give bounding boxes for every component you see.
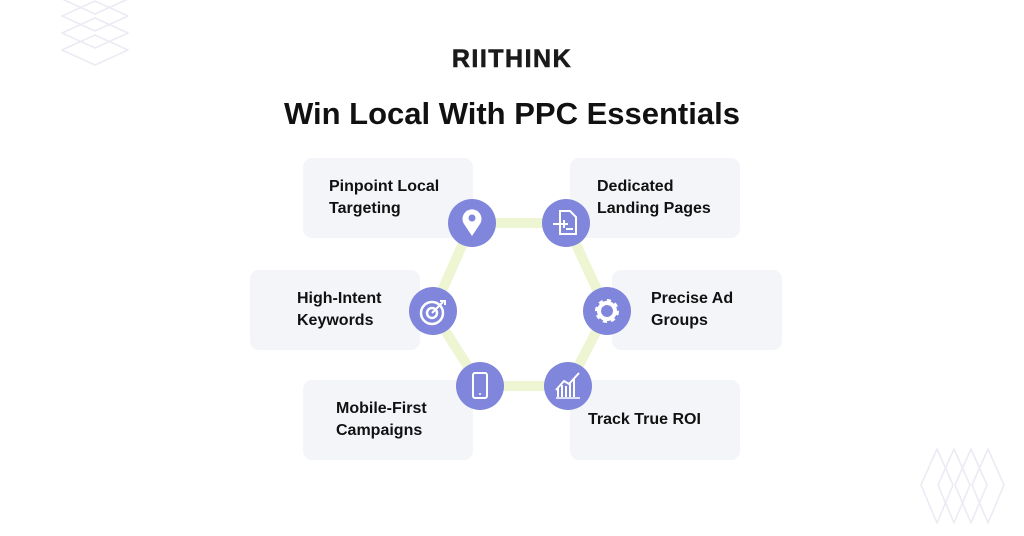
card: Mobile-First Campaigns: Mobile-First — [336, 400, 427, 417]
card: Track True ROI — [570, 380, 740, 460]
icon: document — [542, 199, 590, 247]
card: Mobile-First Campaigns: Campaigns — [336, 422, 422, 439]
decoration: top-left rhombs — [61, 0, 129, 66]
icon: target — [409, 287, 457, 335]
card: Dedicated Landing Pages — [570, 158, 740, 238]
card: Track True ROI: Track True ROI — [588, 411, 701, 428]
card: Pinpoint Local Targeting: Targeting — [329, 200, 401, 217]
decoration: bottom-right rhombs — [920, 448, 1005, 524]
card: Dedicated Landing Pages: Dedicated — [597, 178, 673, 195]
title: Win Local With PPC Essentials — [284, 96, 740, 131]
card: High-Intent Keywords: High-Intent — [297, 290, 381, 307]
card: Pinpoint Local Targeting: Pinpoint Local — [329, 178, 439, 195]
card: Precise Ad Groups: Precise Ad — [651, 290, 733, 307]
icon: growth chart — [544, 362, 592, 410]
icon: gear — [583, 287, 631, 335]
card: Pinpoint Local Targeting — [303, 158, 473, 238]
card: Precise Ad Groups — [612, 270, 782, 350]
icon: phone — [456, 362, 504, 410]
logo: RIITHINK — [452, 45, 572, 73]
card: Mobile-First Campaigns — [303, 380, 473, 460]
icon: location pin — [448, 199, 496, 247]
card: High-Intent Keywords: Keywords — [297, 312, 373, 329]
card: Dedicated Landing Pages: Landing Pages — [597, 200, 711, 217]
card: High-Intent Keywords — [250, 270, 420, 350]
card: Precise Ad Groups: Groups — [651, 312, 708, 329]
